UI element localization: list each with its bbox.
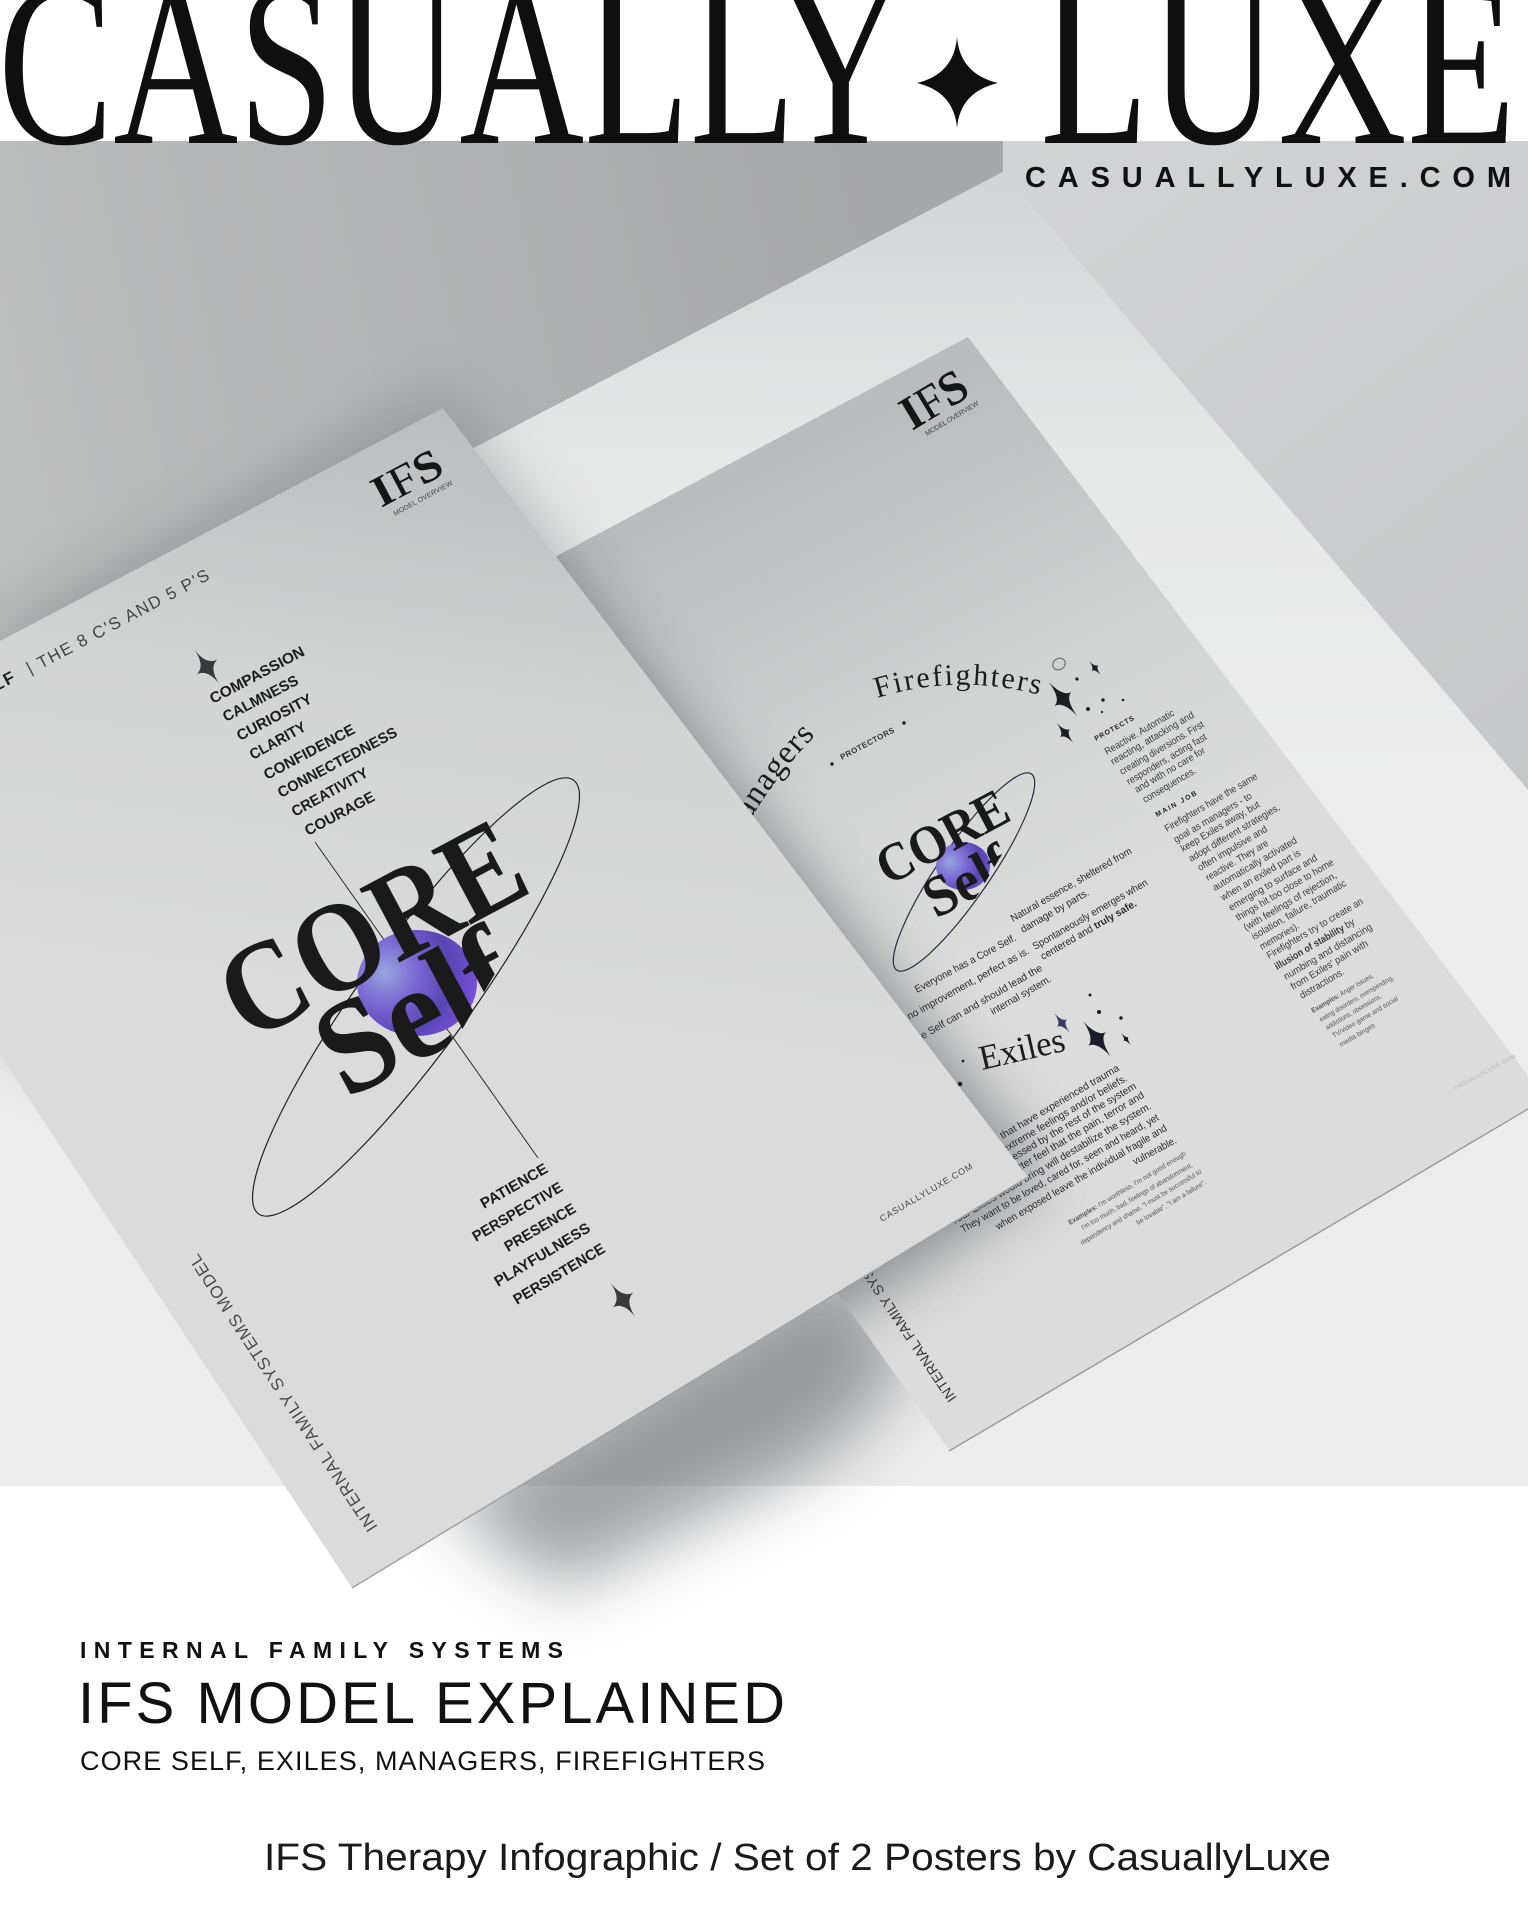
icon: firefighter stars (1040, 656, 1124, 747)
footer url on right sheet: CASUALLYLUXE.COM (1453, 1054, 1517, 1092)
text block: firefighters main job: distractions. (1298, 967, 1347, 1002)
text block: firefighters main job: (with feelings of rejection, (1242, 870, 1339, 934)
poster: core self (left sheet) (0, 408, 1028, 1588)
text block: firefighters examples: TV/video game and social (1331, 995, 1400, 1040)
text block: firefighters main job: goal as managers - to (1172, 791, 1255, 846)
brand header (0, 0, 1528, 194)
text block: firefighters main job: adopt different strategies, (1187, 802, 1282, 865)
icon: wordmark star (917, 37, 998, 128)
product line: IFS Therapy Infographic / Set of 2 Posters by CasuallyLuxe (264, 1837, 1331, 1879)
text block: firefighters main job: isolation, failure, traumatic (1250, 878, 1349, 943)
text block: core self description (870, 846, 1150, 1048)
header logo: IFS: IFS (363, 439, 451, 517)
text block: firefighters examples: eating disorders, overspending, (1318, 975, 1395, 1024)
text block: exiles examples: dependency and shame, "I must be successful to (1079, 1169, 1203, 1247)
text block: firefighters main job: automatically activated (1211, 835, 1299, 894)
text block: exiles description: and hold extreme feelings and/or beliefs. (964, 1073, 1130, 1177)
list: the 5 Ps (469, 1160, 608, 1308)
text block: firefighters main job: things hit too close to home (1234, 857, 1336, 924)
text block: core self description: The Self can and should lead the (909, 963, 1045, 1048)
text block: exiles description: They want to be loved, cared for, seen and heard, yet (959, 1113, 1161, 1236)
text block: firefighters main job: from Exiles' pain with (1289, 938, 1370, 993)
axis line (315, 842, 538, 1158)
white header band (0, 0, 1528, 141)
text block: core self description: Spontaneously emerges when (1031, 877, 1150, 953)
text block: firefighters examples: addictions, obsessions, (1324, 993, 1383, 1032)
floor (474, 172, 1528, 790)
side label on right sheet: INTERNAL FAMILY SYSTEMS MODEL (805, 1187, 959, 1405)
list: the 8 Cs: COMPASSION (207, 643, 308, 708)
text block: exiles description: The latter feel that the pain, terror and (992, 1090, 1147, 1187)
text block: firefighters main job: when an exiled part is (1218, 848, 1303, 904)
header logo: IFS: MODEL OVERVIEW (924, 400, 981, 438)
text block: firefighters main job: Firefighters have the same (1163, 771, 1260, 835)
text block: core self description: Everyone has a Core Self. (913, 933, 1018, 996)
side label: INTERNAL FAMILY SYSTEMS MODEL (185, 1251, 381, 1535)
text block: firefighters examples: Examples: Anger issues, (1310, 973, 1375, 1015)
label: protectors: PROTECTORS (839, 725, 896, 762)
text block: core self description: damage by parts. (1019, 888, 1091, 936)
website url: CASUALLYLUXE.COM (1025, 162, 1511, 194)
subtitle: the 8 Cs and 5 Ps (0, 566, 212, 708)
text block: firefighters protects: and with no care for (1133, 745, 1208, 796)
header logo: IFS: IFS (890, 359, 978, 440)
header logo: IFS: MODEL OVERVIEW (393, 480, 454, 518)
left wall (0, 141, 1003, 695)
text block: firefighters main job: memories). (1258, 921, 1301, 953)
right wall (1003, 141, 1528, 790)
text block: exiles description: vulnerable. (1131, 1135, 1179, 1168)
icon: top sparkle (184, 643, 230, 691)
list: the 8 Cs: CONFIDENCE (261, 721, 358, 784)
text block: firefighters main job: reactive. They are (1204, 838, 1271, 884)
text block: firefighters main job: keep Exiles away, but (1179, 799, 1262, 855)
text block: firefighters protects: creating diversions. First (1118, 719, 1206, 778)
subtitle: the 8 Cs and 5 Ps: | (23, 659, 36, 678)
text block: firefighters main job: illusion of stability by (1273, 917, 1357, 973)
word: Self: Self (290, 898, 542, 1126)
text block: exiles description: They are suppressed by the rest of the system (950, 1081, 1139, 1198)
list: the 8 Cs: CLARITY (247, 719, 309, 763)
subtitle: the 8 Cs and 5 Ps: THE 8 C'S AND 5 P'S (34, 566, 212, 673)
text block: firefighters main job: emerging to surface and (1227, 853, 1320, 914)
list: the 5 Ps: PERSPECTIVE (469, 1179, 566, 1245)
main title: IFS MODEL EXPLAINED (78, 1671, 785, 1736)
core self diagram (226, 777, 580, 1217)
list: the 5 Ps: PERSISTENCE (510, 1240, 608, 1308)
text block: exiles description: Your Exiles would bring will destabilize the system. (949, 1101, 1154, 1228)
list: the 8 Cs: COURAGE (302, 788, 378, 840)
shadow from front sheet (556, 543, 1064, 1340)
text block: firefighters protects: Reactive. Automatic (1103, 708, 1177, 758)
text block: firefighters protects: reacting, attacking and (1109, 710, 1196, 768)
small core self diagram: CORE (865, 777, 1019, 897)
text block: exiles description: Exiles (parts) that have experienced trauma (944, 1063, 1122, 1174)
list: the 5 Ps: PLAYFULNESS (491, 1220, 593, 1290)
text block: core self description: internal system. (989, 974, 1053, 1018)
list: the 8 Cs: CALMNESS (220, 672, 301, 726)
bottom edge of right sheet (949, 1099, 1528, 1451)
purple sphere (357, 930, 477, 1036)
text block: firefighters main job: Firefighters try to create an (1265, 896, 1365, 962)
heading: Exiles: Exiles (975, 1020, 1069, 1078)
text block: core self description: There is no improvement, perfect as is. (870, 946, 1031, 1042)
list: the 8 Cs: CURIOSITY (234, 691, 315, 745)
text block: core self description: centered and truly safe. (1039, 899, 1139, 963)
text block: firefighters examples (1310, 973, 1400, 1049)
caption block (78, 1637, 1331, 1879)
small core self diagram (878, 772, 1036, 972)
subtitle: CORE SELF, EXILES, MANAGERS, FIREFIGHTERS (80, 1746, 765, 1776)
list: the 8 Cs: CONNECTEDNESS (275, 724, 400, 802)
list: the 5 Ps: PATIENCE (478, 1160, 551, 1212)
small core self diagram: Self (912, 831, 1022, 930)
text block: firefighters examples: media binges (1338, 1022, 1377, 1049)
text block: firefighters protects: responders, acting fast (1125, 732, 1209, 788)
text block: exiles examples: be lovable", "I am a failure". (1135, 1179, 1208, 1227)
cast shadow of the posters (0, 395, 910, 1590)
text block: exiles description: when exposed leave the individual fragile and (993, 1123, 1169, 1233)
text block: exiles examples: I'm too much, bad, feelings of abandonment, (1080, 1162, 1194, 1232)
heading: Firefighters: Firefighters (872, 664, 1040, 698)
label: protectors (830, 721, 906, 766)
text block: firefighters main job: often impulsive and (1196, 824, 1270, 874)
left sheet paper (0, 408, 1028, 1588)
heading: Managers: Managers (743, 726, 813, 816)
sheet edge (352, 1177, 1028, 1588)
text block: exiles examples: Examples: I'm worthless, I'm not good enough (1067, 1151, 1188, 1227)
icon: bottom sparkle (600, 1276, 646, 1324)
text block: firefighters main job (1155, 771, 1375, 1002)
text block: firefighters protects (1094, 708, 1209, 806)
text block: firefighters main job: MAIN JOB (1155, 790, 1198, 819)
orbit ellipse (215, 748, 617, 1246)
poster: parts of the system (right sheet) (556, 337, 1528, 1452)
right sheet paper (380, 337, 1528, 1450)
footer url on left sheet: CASUALLYLUXE.COM (878, 1161, 974, 1224)
text block: firefighters protects: consequences. (1141, 766, 1198, 806)
text block: firefighters protects: PROTECTS (1094, 715, 1136, 743)
word: CORE: CORE (194, 790, 548, 1068)
photographed room background (0, 141, 1528, 1486)
list: the 5 Ps: PRESENCE (501, 1200, 579, 1255)
text block: firefighters main job: numbing and distancing (1282, 922, 1375, 983)
icon: exiles stars (958, 994, 1133, 1086)
list: the 8 Cs (207, 643, 400, 840)
text block: core self description: Natural essence, sheltered from (1009, 846, 1134, 925)
eyebrow: INTERNAL FAMILY SYSTEMS (80, 1637, 563, 1663)
list: the 8 Cs: CREATIVITY (289, 764, 371, 820)
